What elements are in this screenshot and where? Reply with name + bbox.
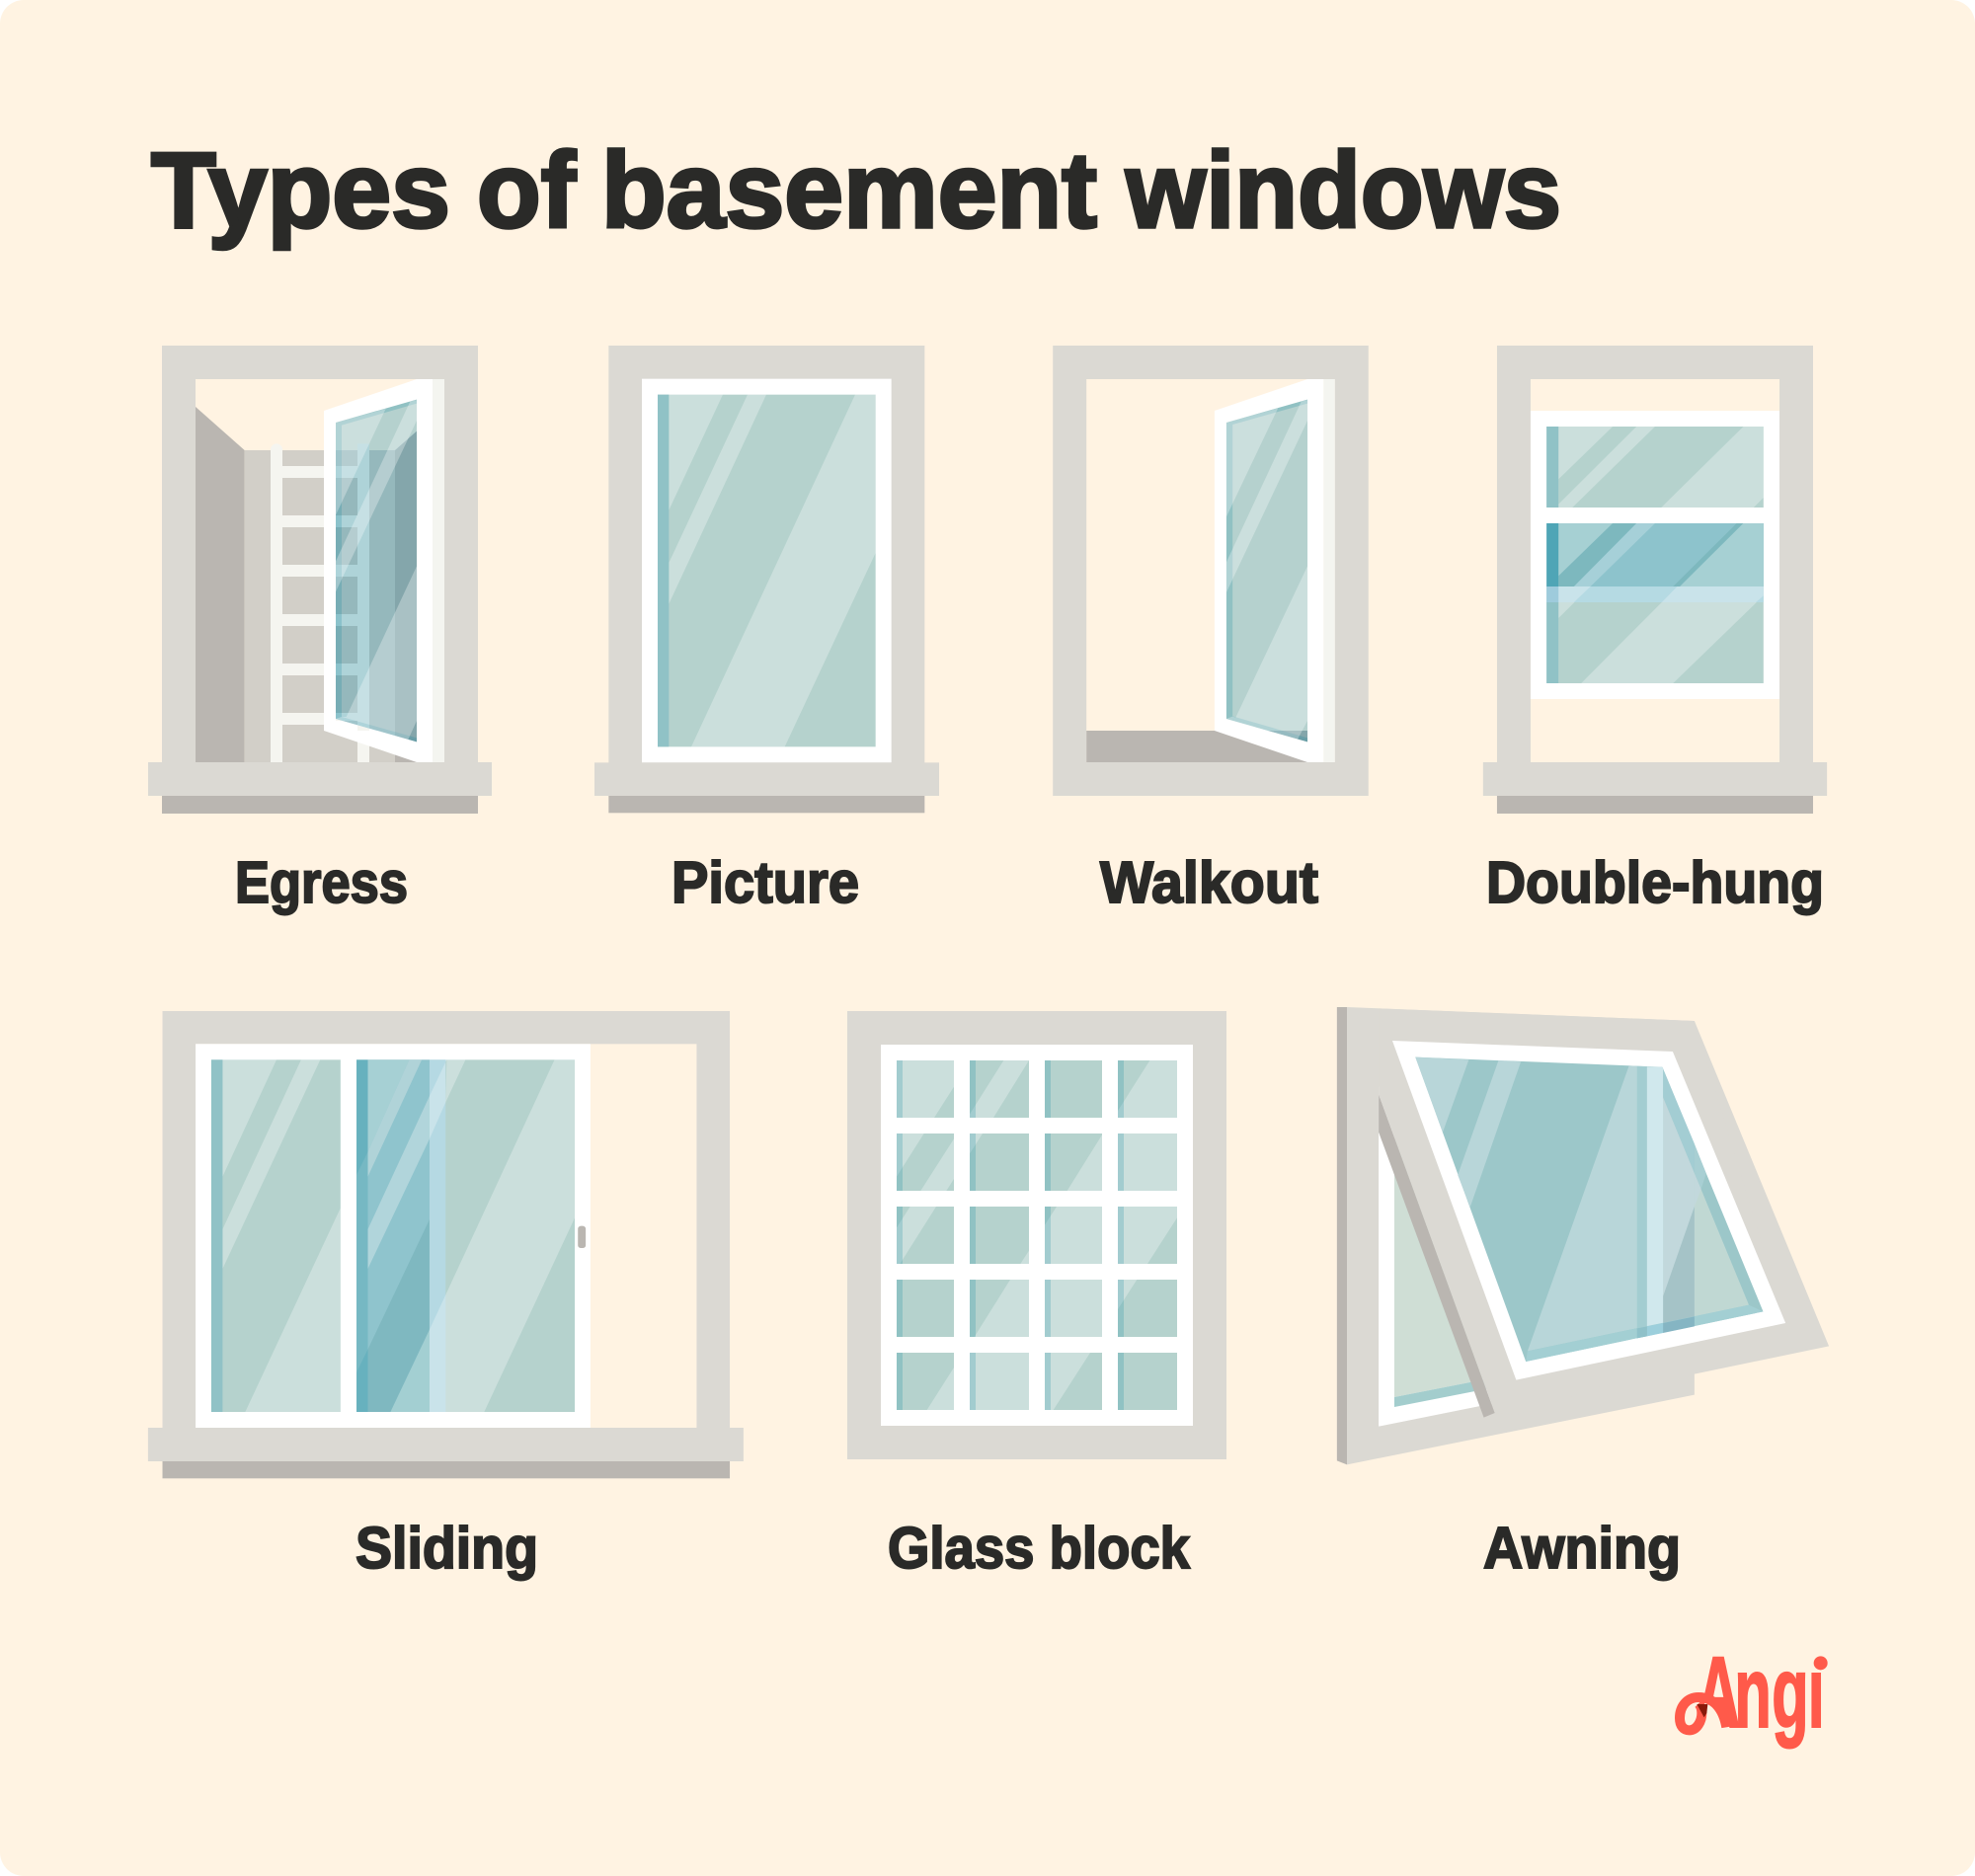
title: of [477,130,577,251]
handle [578,1226,586,1248]
upper pane [1546,427,1764,508]
window: glass block [847,1011,1226,1459]
double-hung frame [1497,346,1813,773]
glass block sash [881,1045,1193,1426]
open door sash [1215,379,1323,762]
picture frame [608,346,924,773]
title: Types [151,130,450,251]
walkout frame [1053,346,1369,796]
sill [148,1428,744,1461]
sill [1483,762,1827,796]
walkout opening [1086,379,1335,762]
tilted sash cover [1379,1008,1785,1415]
fixed pane [211,1059,341,1412]
sliding sash [196,1044,591,1428]
label: Walkout: Walkout [1100,850,1318,915]
fixed inner opening [1379,1086,1497,1427]
double-hung opening [1531,379,1779,762]
title: basement [601,130,1097,251]
glass block frame [847,1011,1226,1459]
sliding frame [163,1011,730,1436]
logo wordmark: Angi [1697,1636,1825,1749]
lower pane [1546,523,1764,683]
logo loop [1680,1649,1830,1730]
glass block panes [897,1060,1177,1410]
sill [148,762,492,796]
sill shadow [162,796,478,814]
walkout glass [1226,400,1307,742]
window: walkout [1053,346,1369,796]
frame edge [1337,1007,1347,1464]
tilted glass [1415,1057,1763,1362]
picture sash [642,379,892,762]
label: Double-hung: Double-hung [1486,850,1824,915]
hinge strip [1323,379,1335,762]
egress well walls [196,407,444,762]
hinge strip [433,379,444,762]
label: Egress: Egress [235,850,408,915]
egress opening [196,379,444,762]
sill [594,762,939,796]
ladder [271,443,369,762]
label: Sliding: Sliding [356,1516,538,1581]
sliding pane [356,1059,575,1412]
logo: Angi [1680,1636,1830,1749]
egress glass [336,400,417,742]
window: picture [594,346,939,813]
overlap of both sashes [1546,523,1764,602]
window: egress [148,346,492,814]
window: sliding [148,1011,744,1478]
window: double-hung [1483,346,1827,814]
floor [1086,731,1313,762]
awning frame [1347,1007,1829,1464]
window: awning [1337,1007,1829,1464]
title: windows [1125,130,1561,251]
sill shadow [1497,796,1813,814]
label: Glass block: Glass block [888,1516,1190,1581]
open sash [324,379,433,762]
egress frame [162,346,478,773]
sill shadow [163,1461,730,1478]
picture glass [658,395,876,746]
support arm [1379,1094,1495,1418]
label: Picture: Picture [672,850,859,915]
double-hung sash [1531,411,1779,699]
sill shadow [608,796,924,813]
tilted sash [1392,1041,1785,1380]
sliding opening [196,1044,696,1428]
label: Awning: Awning [1483,1516,1681,1581]
